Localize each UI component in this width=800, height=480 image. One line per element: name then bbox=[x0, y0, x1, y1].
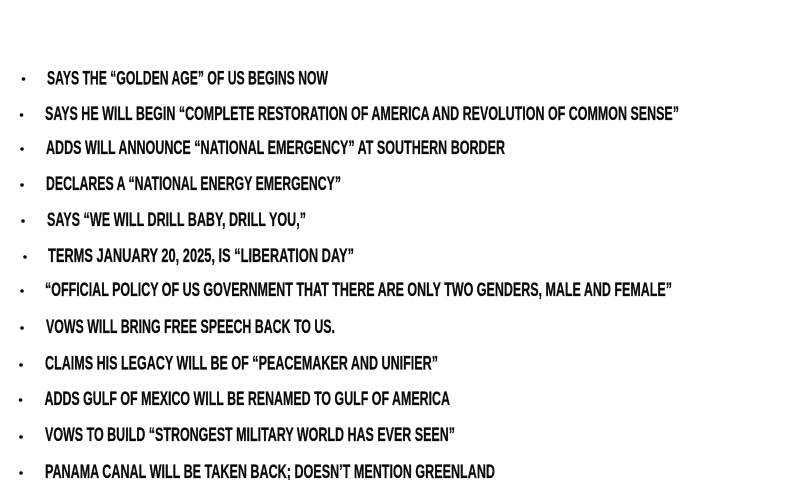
list item 6: TERMS JANUARY 20, 2025, IS “LIBERATION DAY” bbox=[48, 245, 354, 267]
list item 9: CLAIMS HIS LEGACY WILL BE OF “PEACEMAKER AND UNIFIER” bbox=[45, 352, 438, 374]
list item 4: DECLARES A “NATIONAL ENERGY EMERGENCY” bbox=[46, 173, 341, 195]
list item 3: ADDS WILL ANNOUNCE “NATIONAL EMERGENCY” AT SOUTHERN BORDER bbox=[46, 137, 505, 159]
list item 11 bbox=[19, 424, 455, 446]
list item 11: VOWS TO BUILD “STRONGEST MILITARY WORLD HAS EVER SEEN” bbox=[45, 424, 455, 446]
list item 9 bbox=[19, 352, 438, 374]
list item 4 bbox=[20, 173, 341, 195]
list item 8 bbox=[20, 316, 335, 338]
list item 1 bbox=[22, 68, 328, 90]
list item 10 bbox=[19, 388, 450, 410]
list item 8: VOWS WILL BRING FREE SPEECH BACK TO US. bbox=[46, 316, 335, 338]
list item 6 bbox=[23, 245, 354, 267]
list item 5 bbox=[21, 209, 306, 231]
list item 5: SAYS “WE WILL DRILL BABY, DRILL YOU,” bbox=[47, 209, 306, 231]
list item 1: SAYS THE “GOLDEN AGE” OF US BEGINS NOW bbox=[47, 68, 328, 90]
list item 12 bbox=[19, 461, 495, 480]
list item 10: ADDS GULF OF MEXICO WILL BE RENAMED TO GULF OF AMERICA bbox=[44, 388, 450, 410]
list item 3 bbox=[20, 137, 505, 159]
